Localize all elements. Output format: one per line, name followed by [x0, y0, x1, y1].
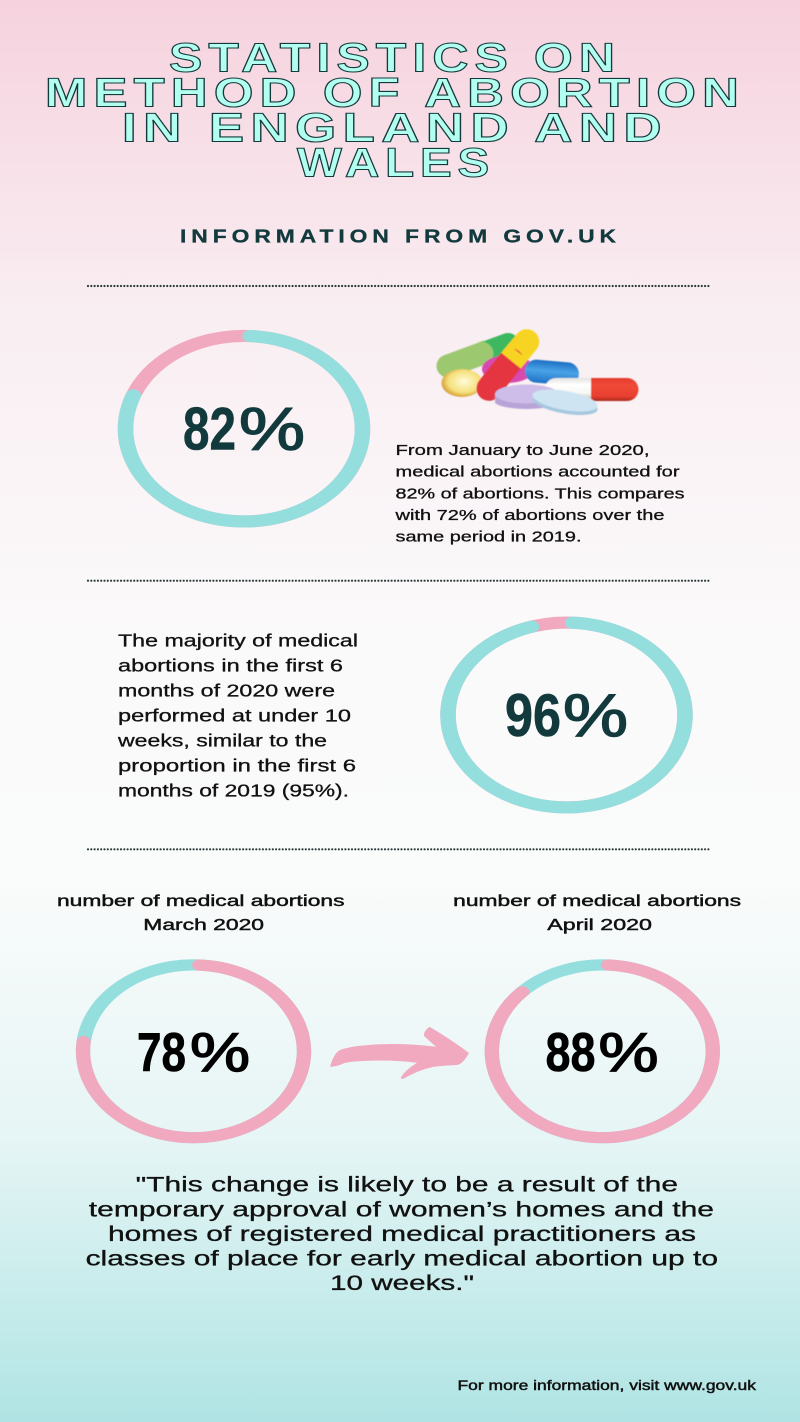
value: 82% — [183, 396, 305, 462]
quote: 10 weeks." — [330, 1272, 474, 1295]
quote: classes of place for early medical abortion up to — [86, 1248, 718, 1271]
donut chart: 88% — [486, 960, 718, 1142]
arrow — [330, 1027, 469, 1079]
description: 96%: abortions in the first 6 — [118, 656, 343, 676]
value: 78%: 78 — [137, 1021, 186, 1083]
label: April 2020: number of medical abortions — [453, 893, 741, 910]
label: March 2020 — [57, 893, 345, 934]
description: 96%: months of 2020 were — [118, 681, 335, 701]
description: 82%: 82% of abortions. This compares — [396, 485, 684, 502]
label: March 2020: number of medical abortions — [57, 893, 345, 910]
quote: homes of registered medical practitioners as — [108, 1223, 696, 1246]
panel: 82% statistic — [119, 331, 685, 546]
subtitle: INFORMATION FROM GOV.UK — [180, 226, 621, 247]
value: 96%: 96 — [505, 682, 561, 749]
panel: April 2020 — [453, 893, 741, 1142]
description: 82%: From January to June 2020, — [396, 442, 650, 459]
value: 82%: 82 — [183, 396, 236, 462]
label: April 2020 — [453, 893, 741, 934]
value: 88% — [546, 1021, 658, 1083]
description: 96%: weeks, similar to the — [117, 731, 327, 751]
description: 82%: same period in 2019. — [396, 529, 582, 546]
donut chart: 78% — [77, 960, 310, 1142]
footer note: For more information, visit www.gov.uk — [458, 1378, 756, 1393]
value: 78% — [137, 1021, 250, 1083]
description: 96%: The majority of medical — [118, 631, 358, 651]
value: 78%: % — [190, 1021, 250, 1083]
description: 82% — [394, 442, 684, 546]
label: April 2020: April 2020 — [547, 917, 653, 934]
title: METHOD OF ABORTION — [45, 70, 745, 116]
description: 96% — [117, 631, 358, 801]
description: 82%: medical abortions accounted for — [396, 464, 680, 481]
panel: March 2020 — [57, 893, 345, 1142]
title — [45, 35, 745, 186]
value: 96%: % — [563, 682, 628, 749]
donut chart: 96% — [442, 618, 691, 812]
description: 96%: months of 2019 (95%). — [118, 781, 349, 801]
value: 96% — [505, 682, 628, 749]
quote — [86, 1174, 718, 1295]
title: WALES — [297, 140, 495, 186]
description: 96%: performed at under 10 — [118, 706, 351, 726]
quote: "This change is likely to be a result of the — [136, 1174, 678, 1197]
donut chart: 82% — [119, 331, 369, 526]
label: March 2020: March 2020 — [143, 917, 265, 934]
value: 82%: % — [239, 396, 305, 462]
quote: temporary approval of women’s homes and the — [89, 1198, 714, 1221]
title: STATISTICS ON — [169, 35, 621, 81]
value: 88%: % — [598, 1021, 658, 1083]
title: IN ENGLAND AND — [122, 105, 668, 151]
description: 82%: with 72% of abortions over the — [394, 507, 664, 524]
value: 88%: 88 — [546, 1021, 596, 1083]
description: 96%: proportion in the first 6 — [118, 756, 356, 776]
panel: 96% statistic — [117, 618, 691, 812]
icon: pills — [442, 342, 638, 419]
